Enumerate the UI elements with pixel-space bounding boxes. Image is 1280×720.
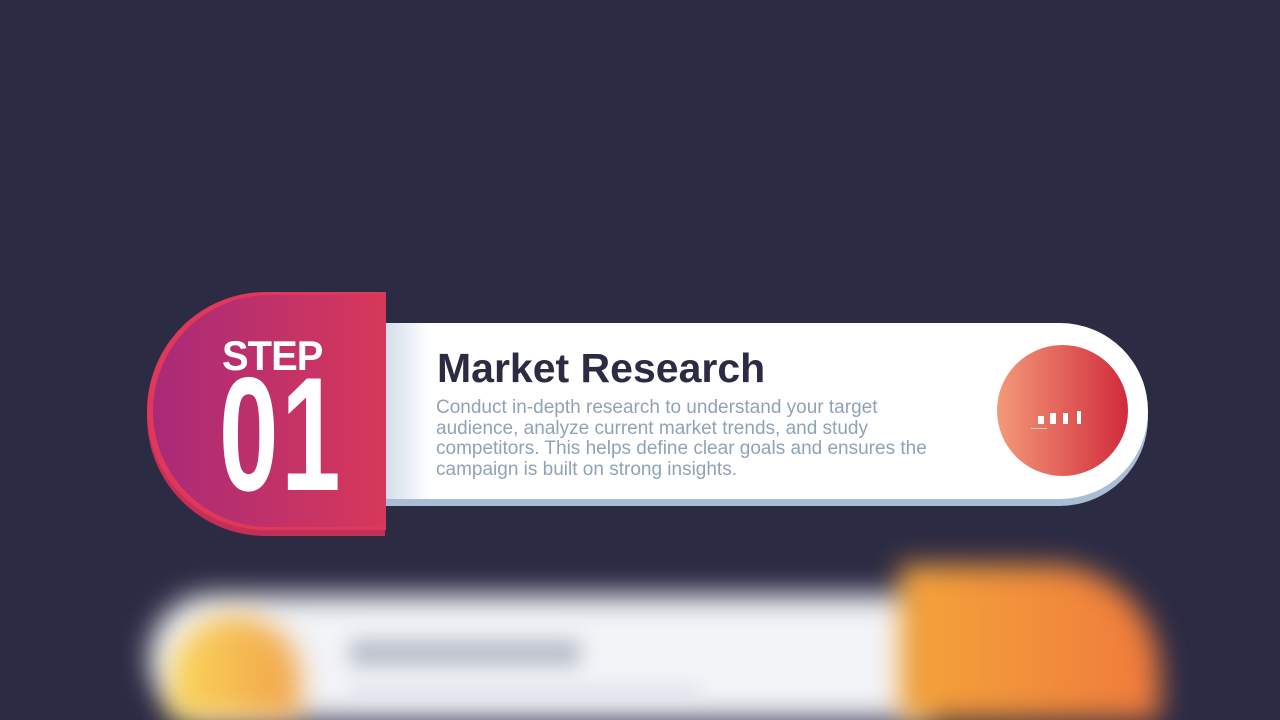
- description: Conduct in-depth research to understand your target audience, analyze current market trends, and study competitors. This helps define clear goals and ensures the campaign is built on strong insights.: [436, 397, 927, 480]
- card: Market Research: [386, 323, 1148, 506]
- title: Market Research: [437, 345, 765, 391]
- step number: 01: [219, 344, 343, 525]
- blurred next step card: [128, 542, 1183, 720]
- icon: bar chart circle: [997, 345, 1128, 476]
- step label: STEP: [222, 332, 322, 379]
- badge: STEP 01: [147, 292, 386, 536]
